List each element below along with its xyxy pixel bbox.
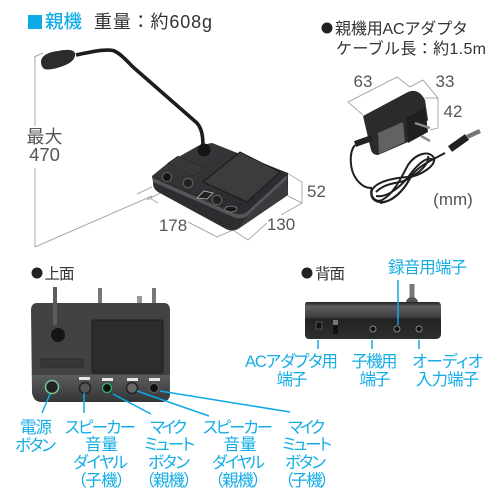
heading: rear view xyxy=(302,265,345,283)
adapter body xyxy=(363,91,428,155)
speaker grille xyxy=(203,152,280,202)
labels: top view: マイク xyxy=(288,418,325,437)
heading: AC adapter: ケーブル長：約1.5m xyxy=(336,39,486,58)
labels: rear view: ACアダプタ用 xyxy=(245,352,338,371)
left dial xyxy=(80,382,90,394)
plug face xyxy=(406,108,428,143)
labels: rear view: オーディオ xyxy=(412,351,483,371)
labels: rear view: 入力端子 xyxy=(416,370,479,389)
heading: rear view: 背面 xyxy=(315,265,345,283)
text: 178: 178 xyxy=(159,216,187,235)
text: mm unit: (mm) xyxy=(433,190,473,209)
labels: top view: （親機） xyxy=(146,471,192,490)
title: main unit weight: 親機 xyxy=(45,11,82,32)
front bevel xyxy=(153,175,287,218)
gooseneck xyxy=(76,50,203,148)
cord and coil xyxy=(351,145,445,203)
labels: top view xyxy=(15,418,332,490)
callout lines: top view xyxy=(42,391,290,416)
labels: top view: ボタン xyxy=(148,453,190,472)
text: adapter dimensions: 33 xyxy=(436,72,454,91)
speaker grille xyxy=(92,320,163,373)
labels: top view: （子機） xyxy=(285,471,329,490)
labels: rear view: 端子 xyxy=(276,370,308,389)
text: adapter dimensions: 63 xyxy=(354,72,372,91)
labels: top view: ミュート xyxy=(144,436,195,454)
labels: top view: （子機） xyxy=(78,471,125,490)
photo: main unit with microphone xyxy=(41,50,288,230)
label plate xyxy=(168,156,205,176)
labels: rear view xyxy=(245,258,483,389)
labels: top view: ダイヤル xyxy=(212,453,265,472)
text: adapter dimensions: 42 xyxy=(444,102,462,121)
microphone foam xyxy=(41,50,75,69)
body silhouette xyxy=(152,143,288,230)
top surface xyxy=(153,143,287,211)
labels: top view: （親機） xyxy=(215,471,261,490)
heading: AC adapter: 親機用ACアダプタ xyxy=(335,20,468,38)
labels: top view: ダイヤル xyxy=(73,453,128,472)
neck base xyxy=(198,144,210,156)
microphone stem and socket xyxy=(53,287,57,325)
main unit dimension lines xyxy=(34,53,302,247)
power button xyxy=(46,380,58,394)
rear connectors xyxy=(100,288,154,305)
labels: top view: スピーカー xyxy=(65,419,136,437)
labels: rear view: 端子 xyxy=(360,370,390,389)
labels: top view: 電源 xyxy=(20,418,52,437)
body xyxy=(31,303,170,402)
labels: top view: マイク xyxy=(150,418,187,437)
labels: top view: 音量 xyxy=(224,435,256,454)
labels: top view: スピーカー xyxy=(203,419,273,437)
title: main unit weight: 重量：約608g xyxy=(94,12,212,32)
text: 130: 130 xyxy=(267,215,295,234)
heading: top view xyxy=(32,265,74,283)
photo: AC adapter xyxy=(351,91,480,203)
body xyxy=(305,302,441,339)
microphone stem xyxy=(410,284,414,298)
control strip xyxy=(32,375,170,402)
wedge side xyxy=(238,179,288,229)
photo: rear view xyxy=(305,284,441,339)
labels: top view: ミュート xyxy=(282,436,332,454)
text: adapter dimensions xyxy=(354,72,462,121)
text: 52: 52 xyxy=(307,182,326,201)
labels: top view: ボタン xyxy=(15,436,56,455)
text: max height xyxy=(26,127,62,165)
heading: top view: 上面 xyxy=(44,265,74,283)
controls xyxy=(162,172,172,182)
control labels xyxy=(79,377,160,381)
callout lines: rear view xyxy=(318,280,419,349)
labels: rear view: 録音用端子 xyxy=(388,258,467,277)
labels: rear view: 子機用 xyxy=(352,352,398,371)
right dial xyxy=(126,382,138,394)
mic mute button child xyxy=(150,384,158,392)
text: max height: 最大 xyxy=(26,127,62,147)
label plate xyxy=(41,359,83,367)
photo: top view xyxy=(31,287,170,402)
switch xyxy=(333,320,338,334)
heading: AC adapter xyxy=(322,20,486,58)
DC plug xyxy=(450,137,467,149)
text: max height: 470 xyxy=(29,144,60,165)
prongs xyxy=(415,123,430,141)
label panel xyxy=(378,122,405,154)
labels: top view: 音量 xyxy=(85,435,118,454)
adapter dimension lines xyxy=(348,77,438,130)
title: main unit weight xyxy=(28,11,212,32)
labels: top view: ボタン xyxy=(285,453,326,472)
ports xyxy=(316,322,322,329)
strain relief xyxy=(355,138,372,144)
mic mute button parent xyxy=(102,384,112,392)
